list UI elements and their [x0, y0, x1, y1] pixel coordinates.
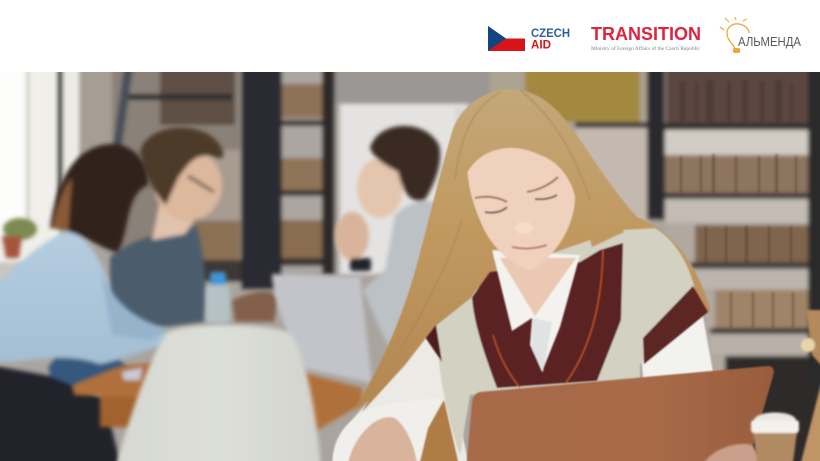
person: man by whiteboard [332, 122, 444, 345]
main student: hair back [352, 91, 711, 412]
logo: Czech Aid [488, 26, 570, 52]
hands and table [72, 291, 362, 430]
student hand on laptop edge [704, 442, 758, 461]
logo: Almenda light bulb: АЛЬМЕНДА [738, 34, 801, 49]
foreground wooden chair right [799, 310, 820, 461]
logo: Almenda light bulb [720, 17, 801, 53]
main student: sleeve and hand [333, 397, 460, 461]
white chair [115, 325, 321, 461]
book spines [680, 80, 797, 328]
main student: white shirt [333, 300, 713, 461]
logo: Transition: TRANSITION [591, 24, 701, 44]
main student: front hair [362, 89, 624, 412]
logo: Czech Aid: AID [531, 38, 551, 52]
person: man with glasses [110, 128, 223, 330]
water bottle [206, 272, 230, 323]
main student laptop [466, 366, 774, 461]
main student: knit vest [412, 228, 708, 455]
logo: Czech Aid: CZECH [531, 26, 570, 40]
logo: Transition: Ministry of Foreign Affairs of the Czech Republic [591, 45, 701, 52]
person: woman with dark hair [0, 144, 170, 461]
main student: shirt collar and placket [492, 250, 580, 372]
main student: neck and face [467, 148, 576, 316]
open laptop on table [272, 274, 372, 383]
plant on window sill [2, 218, 37, 258]
white header band [0, 0, 820, 72]
coffee cup [751, 412, 799, 461]
